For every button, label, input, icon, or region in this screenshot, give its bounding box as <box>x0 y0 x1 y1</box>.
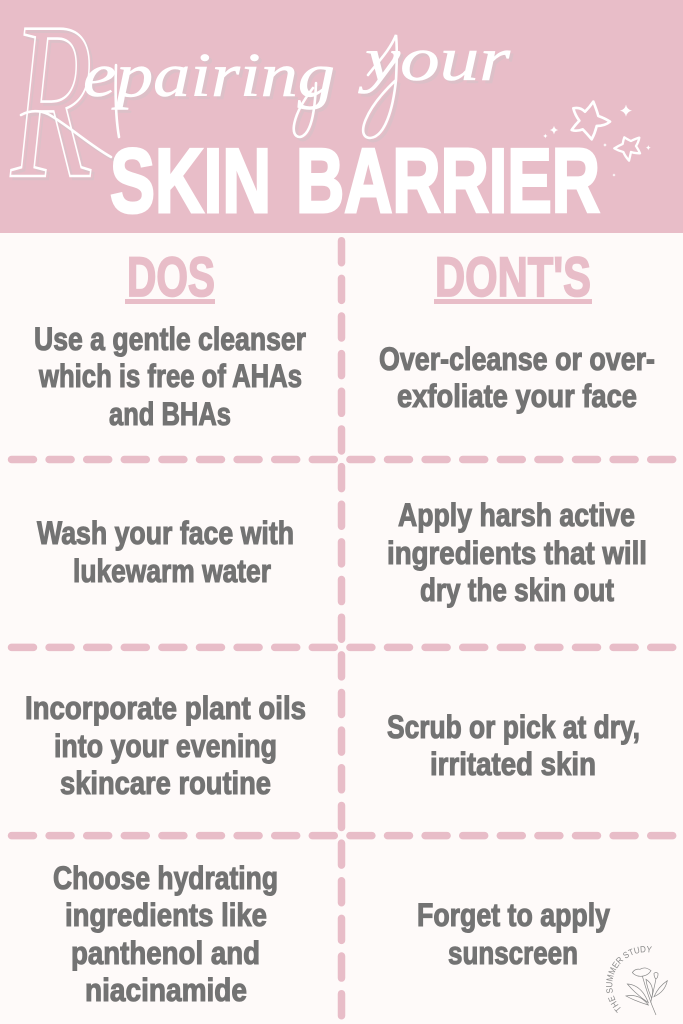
do: hydrating ingredients: panthenol and <box>71 935 260 971</box>
do: gentle cleanser: which is free of AHAs <box>38 358 302 394</box>
heading: DOS: DOS <box>127 245 215 308</box>
dont: scrub or pick: irritated skin <box>430 746 596 782</box>
title: script line: your <box>360 29 514 97</box>
do: hydrating ingredients <box>53 860 278 1008</box>
dont: harsh actives: Apply harsh active <box>398 497 635 533</box>
title: SKIN BARRIER <box>110 131 600 232</box>
dont: over-cleanse: exfoliate your face <box>397 378 637 414</box>
dont: sunscreen: Forget to apply <box>417 897 610 933</box>
icon: stars and sparkles <box>543 102 651 177</box>
do: lukewarm water <box>37 515 294 589</box>
heading: DONT'S: DONT'S <box>435 245 591 308</box>
icon: flower sprig <box>626 968 667 1015</box>
header banner <box>0 0 683 233</box>
do: lukewarm water: Wash your face with <box>37 515 294 551</box>
do: plant oils <box>25 690 306 801</box>
dont: scrub or pick <box>387 709 640 782</box>
dont: harsh actives: dry the skin out <box>420 572 614 608</box>
do: plant oils: skincare routine <box>60 765 271 801</box>
dont: harsh actives <box>387 497 647 608</box>
dont: harsh actives: ingredients that will <box>387 535 647 571</box>
title: script line: epairing <box>83 42 335 110</box>
do: gentle cleanser: and BHAs <box>109 396 231 432</box>
do: plant oils: Incorporate plant oils <box>25 690 306 726</box>
dont: sunscreen <box>417 897 610 971</box>
logo: The Summer Study: THE SUMMER STUDY <box>606 946 652 1013</box>
title: script line <box>10 0 514 228</box>
do: gentle cleanser <box>34 321 306 432</box>
dont: sunscreen: sunscreen <box>448 935 578 971</box>
dont: over-cleanse <box>379 341 655 414</box>
do: hydrating ingredients: Choose hydrating <box>53 860 278 896</box>
do: hydrating ingredients: ingredients like <box>65 897 267 933</box>
title: SKIN BARRIER: SKIN <box>110 131 271 232</box>
title: script line: your <box>357 26 511 94</box>
do: plant oils: into your evening <box>54 728 277 764</box>
do: gentle cleanser: Use a gentle cleanser <box>34 321 306 357</box>
table dividers <box>12 241 680 1020</box>
do: hydrating ingredients: niacinamide <box>85 972 247 1008</box>
title: script line: epairing <box>86 45 338 113</box>
do: lukewarm water: lukewarm water <box>73 553 271 589</box>
